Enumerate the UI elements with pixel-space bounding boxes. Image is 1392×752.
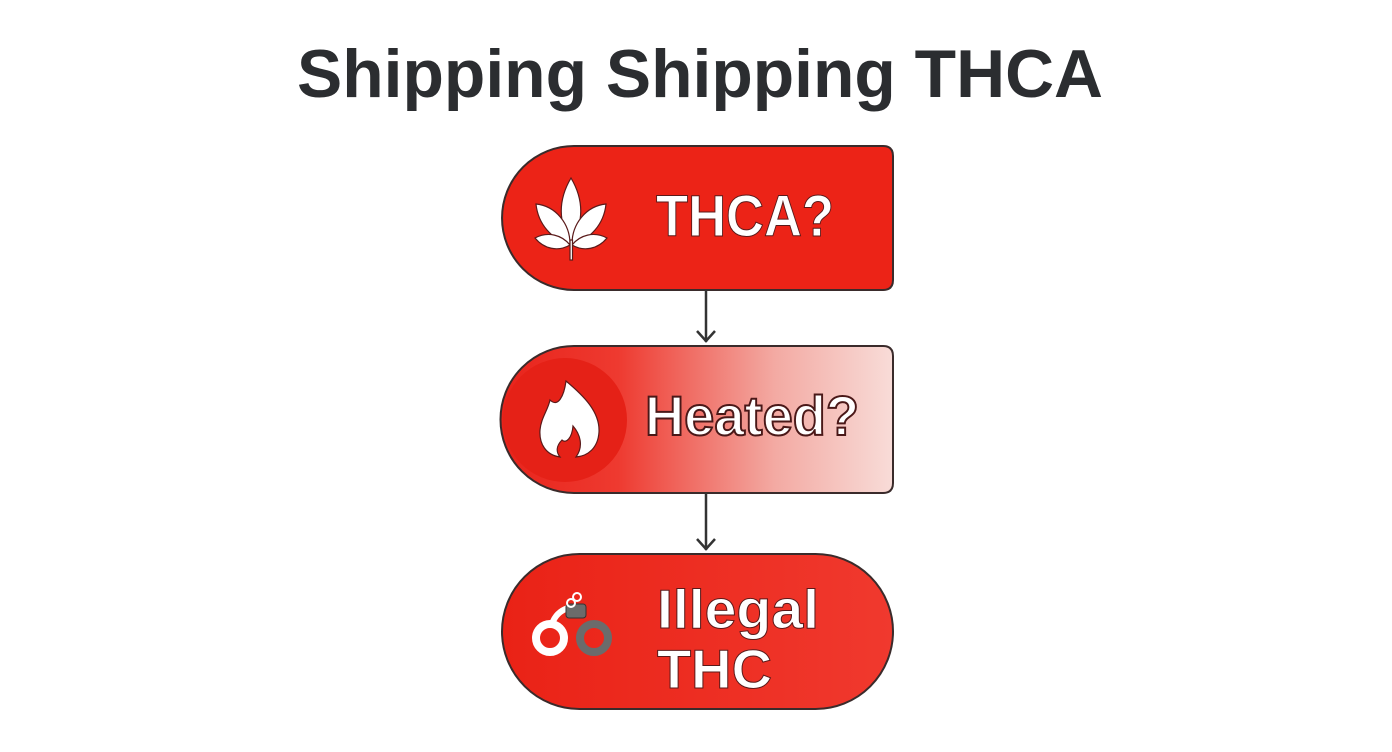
icon: flame in circle	[503, 358, 627, 482]
icon: cannabis leaf	[535, 178, 607, 260]
arrow 2	[697, 493, 715, 550]
label: THCA?: THCA?	[656, 184, 834, 249]
icon: handcuffs	[536, 593, 608, 652]
arrow 1	[697, 290, 715, 342]
title: Shipping Shipping THCA	[297, 36, 1103, 112]
label: Heated?: Heated?	[645, 384, 859, 447]
label: Illegal THC: Illegal	[657, 578, 819, 640]
box: Illegal THC	[502, 554, 893, 709]
box: THCA?	[502, 146, 893, 290]
box: Heated?	[500, 346, 893, 493]
label: Illegal THC: THC	[657, 638, 772, 700]
